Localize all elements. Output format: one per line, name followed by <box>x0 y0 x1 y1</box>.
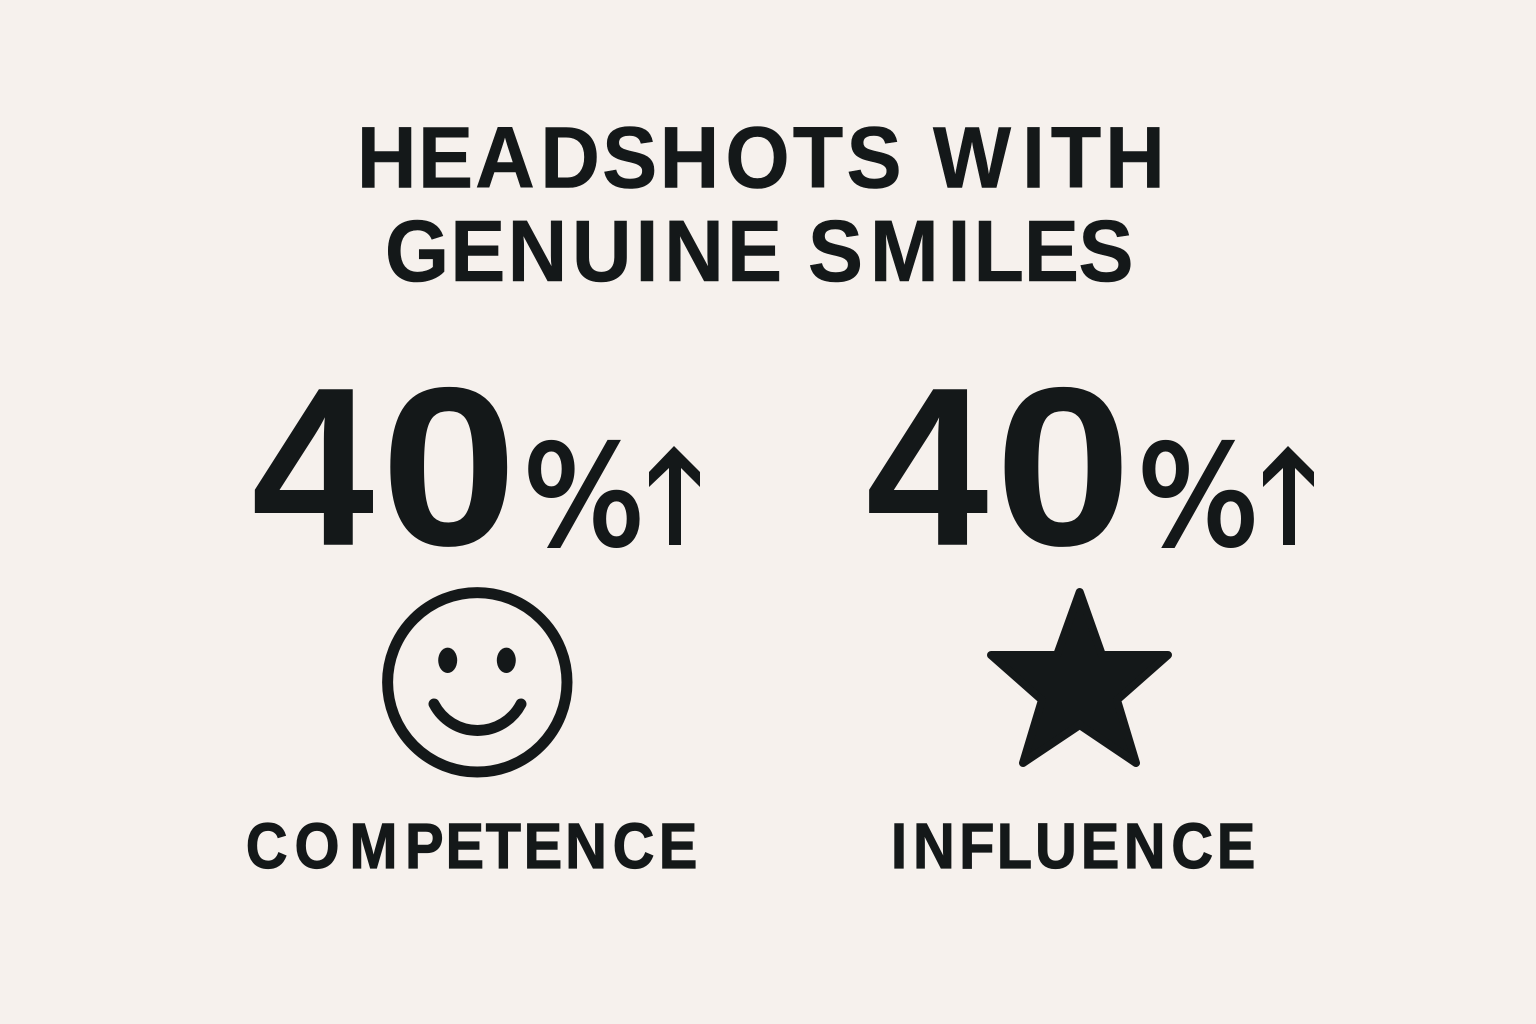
stat: 40 percent up, competence <box>252 341 700 594</box>
stat: 40 percent up, influence <box>866 341 1314 594</box>
icon: star <box>991 592 1168 763</box>
panel: competence <box>246 341 700 882</box>
title: HEADSHOTS WITH <box>357 109 1165 206</box>
icon: smiley face <box>388 593 567 772</box>
title: GENUINE SMILES <box>385 202 1134 299</box>
title <box>357 109 1165 299</box>
label: influence: INFLUENCE <box>891 810 1255 882</box>
stat: 40 percent up, competence: 0 <box>381 341 517 594</box>
stat: 40 percent up, influence: % <box>1137 415 1260 578</box>
stat: 40 percent up, influence: 4 <box>866 341 988 593</box>
label: competence: COMPETENCE <box>246 810 697 882</box>
stat: 40 percent up, competence: 4 <box>252 341 374 593</box>
stat: 40 percent up, competence: % <box>522 415 645 578</box>
stat: 40 percent up, influence: 0 <box>995 341 1132 594</box>
panel: influence <box>866 341 1314 882</box>
